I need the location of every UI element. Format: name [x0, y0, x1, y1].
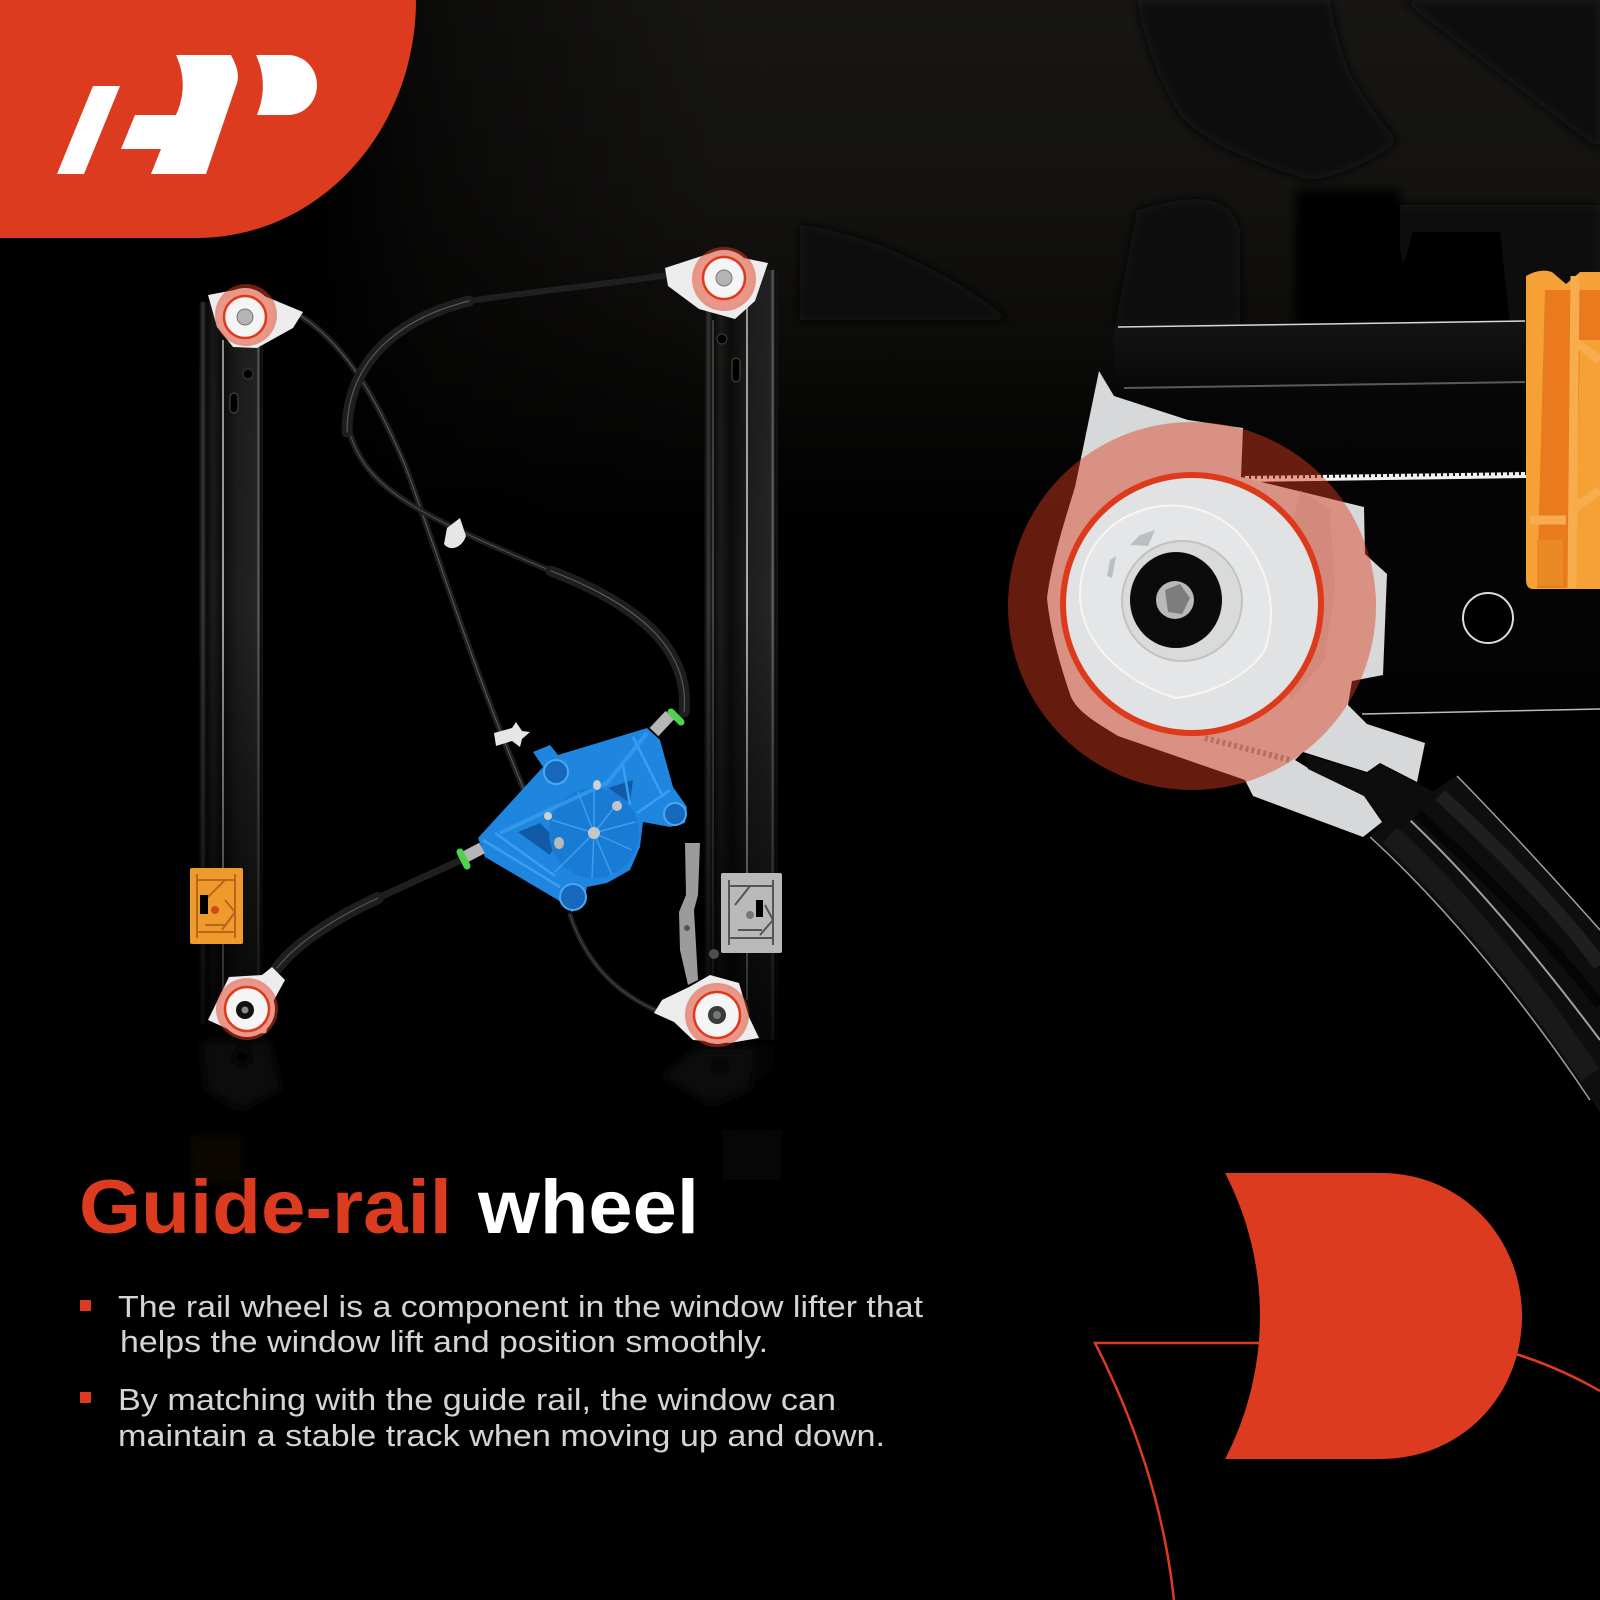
heading: Guide-rail	[79, 1165, 452, 1250]
highlighted wheel: bottom right	[654, 975, 759, 1047]
detail: rail hole	[1463, 593, 1513, 643]
sheathed cable: motor housing to lower-left wheel	[277, 860, 461, 968]
metal bracket on right rail	[679, 843, 719, 985]
detail view: enlarged guide-rail wheel	[1008, 271, 1600, 1112]
logo badge	[0, 0, 416, 238]
detail: twisted steel cable	[1243, 473, 1526, 479]
sheathed cable: top-right wheel to motor housing	[347, 275, 684, 712]
silver glass clamp	[721, 873, 782, 953]
bullet 1: helps the window lift and position smoothly.	[120, 1324, 768, 1359]
icon: logo mark	[57, 55, 317, 174]
thin cable: top-left wheel to lower-right wheel	[301, 316, 664, 1014]
detail: white plastic bracket	[1047, 371, 1425, 837]
bullet 1: The rail wheel is a component in the window lifter that	[118, 1289, 923, 1324]
detail: cable nipple between bracket halves	[1304, 754, 1440, 830]
window regulator: right guide rail	[704, 270, 778, 1040]
cable clips	[444, 518, 530, 747]
bullet 2: maintain a stable track when moving up and down.	[118, 1418, 885, 1453]
orange glass clamp	[190, 868, 243, 944]
highlighted wheel: top right	[665, 247, 768, 319]
bullet 1	[80, 1289, 923, 1359]
blue motor housing	[478, 728, 687, 912]
bullet 2	[80, 1382, 885, 1453]
left product photo reflection	[190, 1040, 782, 1185]
detail: orange glass clamp	[1526, 271, 1600, 589]
highlighted wheel: bottom left	[208, 967, 285, 1040]
detail: wheel	[1063, 475, 1321, 733]
window regulator: left guide rail	[199, 302, 263, 1024]
bullet list	[80, 1289, 923, 1453]
mounting bosses	[544, 760, 686, 910]
detail: rail body	[1114, 320, 1600, 714]
highlighted wheel: top left	[208, 284, 303, 348]
detail: thick cable sheath	[1370, 776, 1600, 1112]
bullet 2: By matching with the guide rail, the window can	[118, 1382, 836, 1417]
decorative logo shape and lines, lower right	[1095, 1173, 1600, 1600]
heading: wheel	[477, 1165, 699, 1250]
detail: red highlight disc	[1008, 422, 1376, 790]
cable end fittings: spring and green ferrule	[460, 712, 681, 866]
